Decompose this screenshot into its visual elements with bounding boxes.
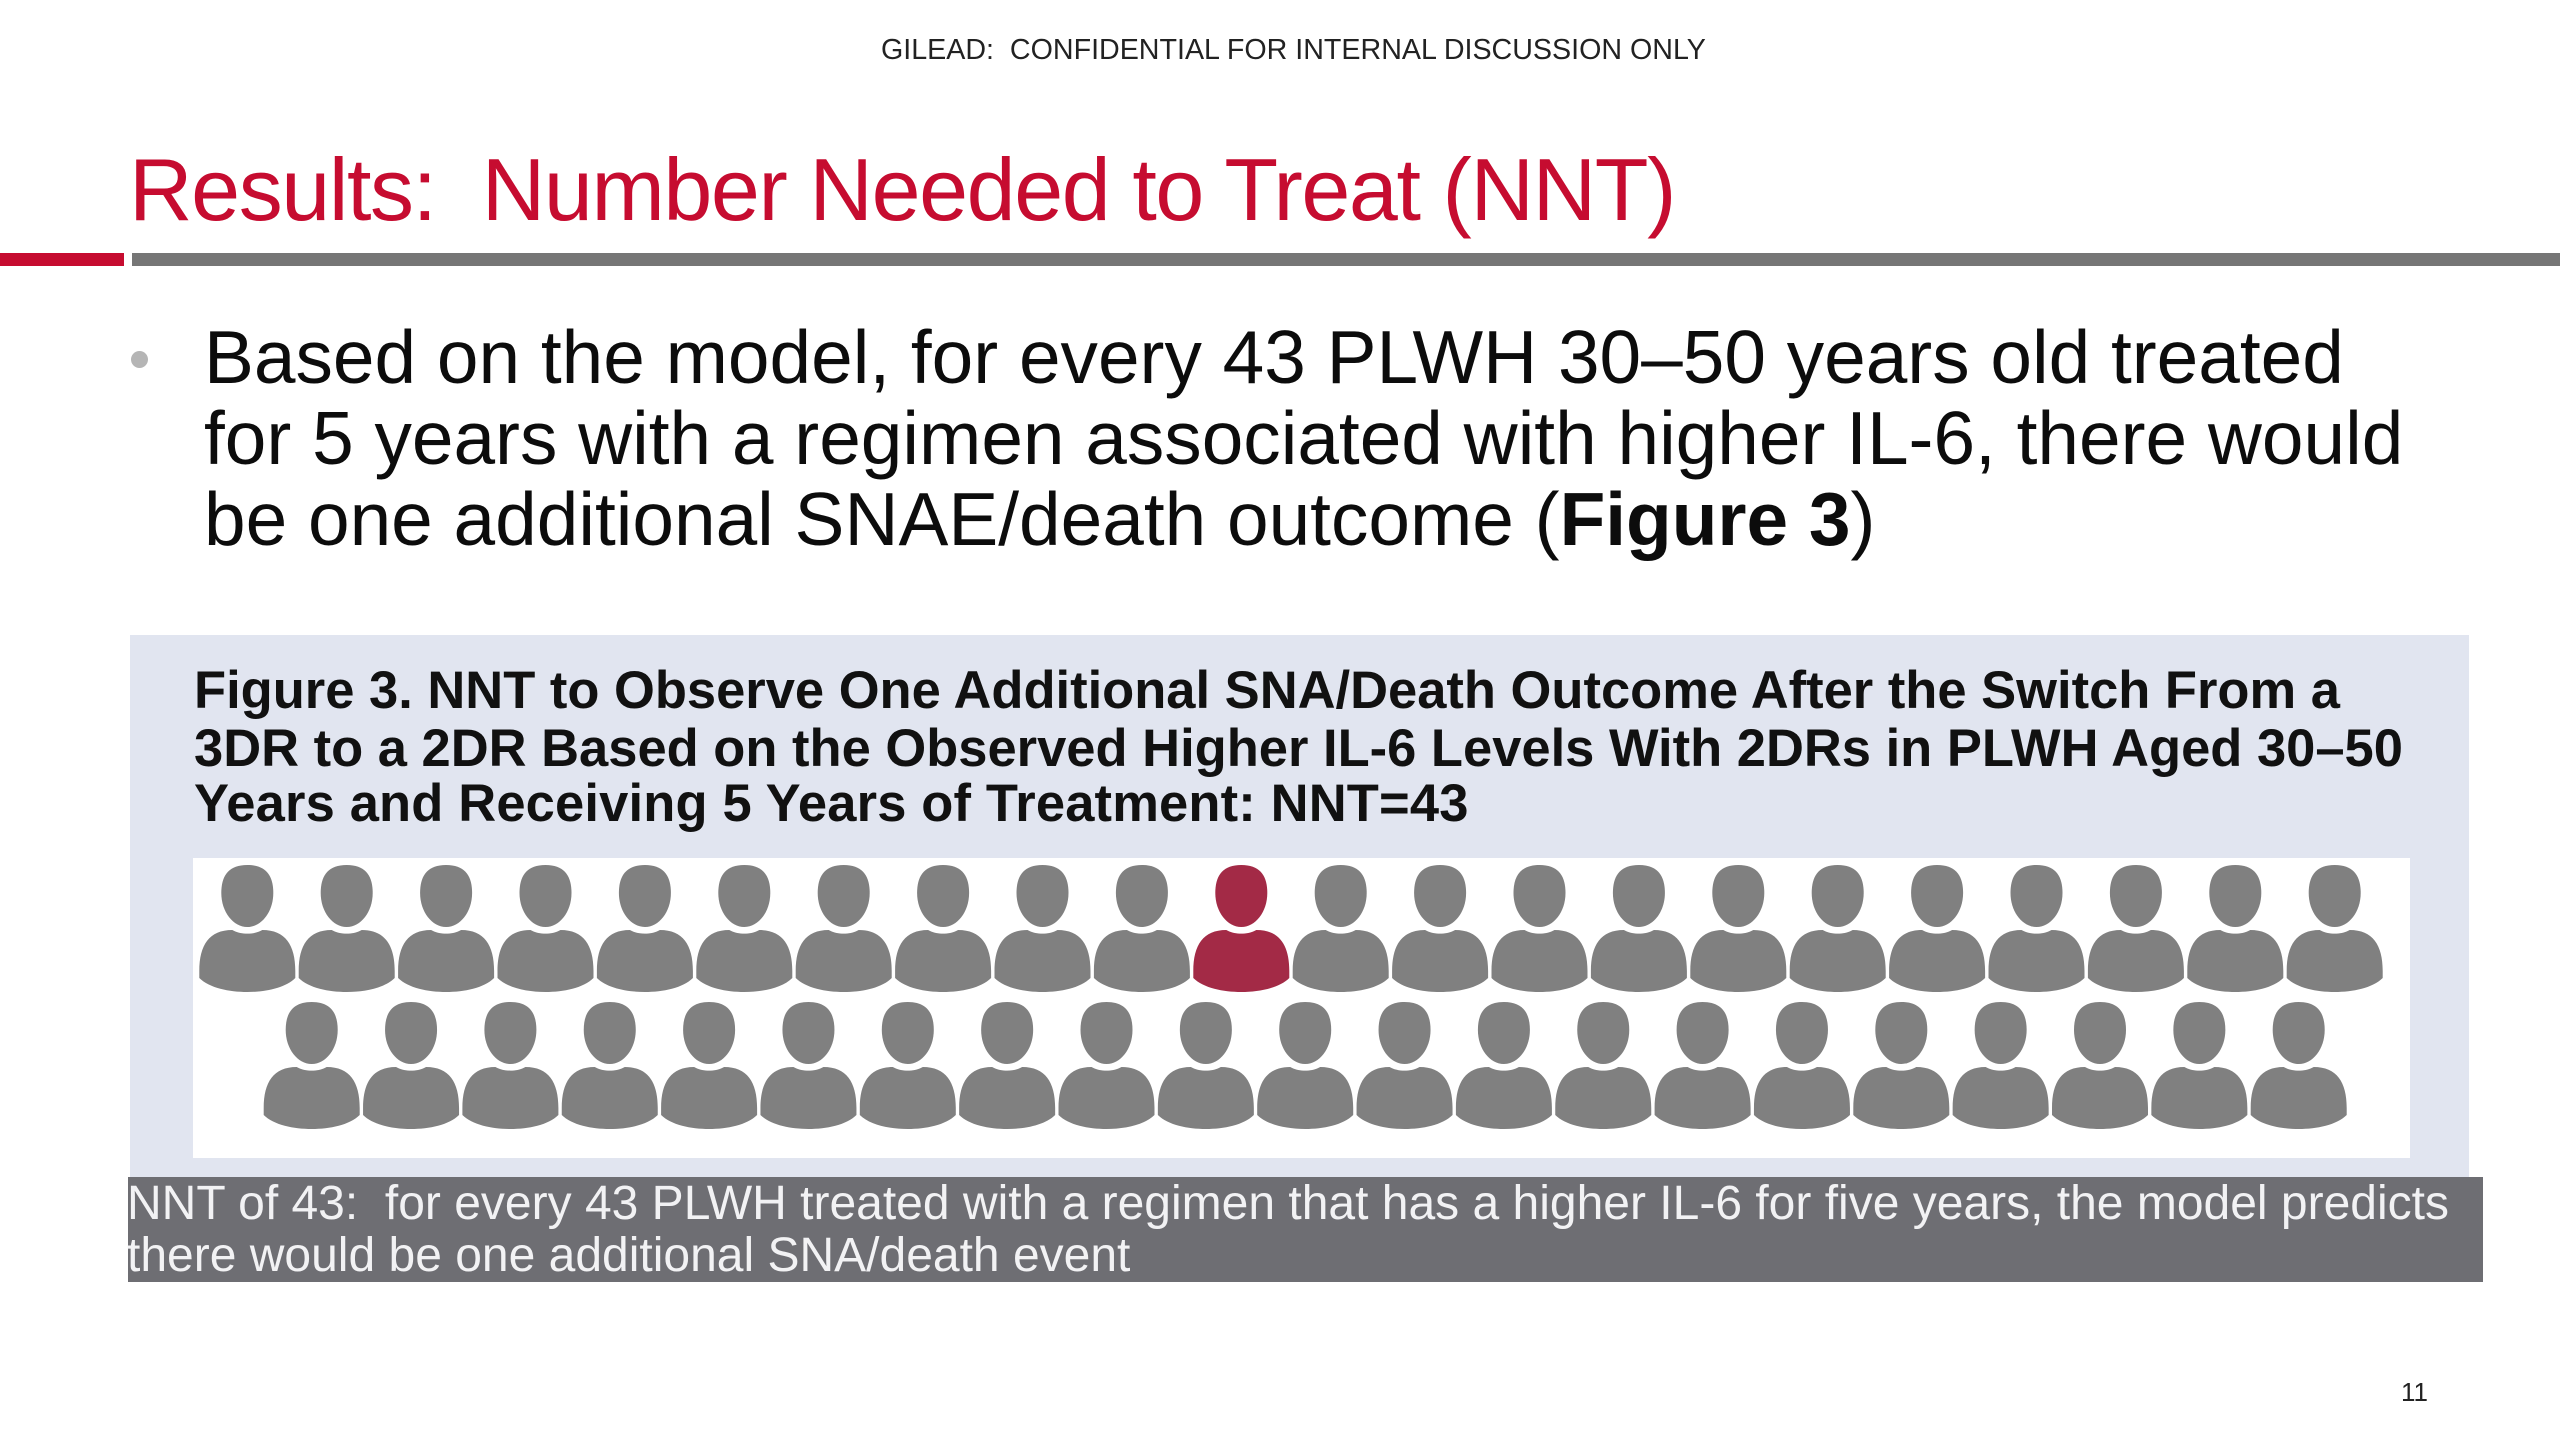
pictogram area <box>193 858 2410 1158</box>
body text: be one additional SNAE/death outcome (Figure 3) <box>204 477 1875 561</box>
callout: NNT explanation: there would be one additional SNA/death event <box>127 1229 1130 1282</box>
icon: highlighted person <box>1193 865 1289 992</box>
callout: NNT explanation <box>128 1177 2483 1282</box>
bullet marker <box>131 351 148 368</box>
figure heading: 3DR to a 2DR Based on the Observed Higher IL-6 Levels With 2DRs in PLWH Aged 30–50 <box>194 719 2403 778</box>
title: Results: Number Needed to Treat (NNT) <box>129 140 1675 239</box>
header confidentiality notice: GILEAD: CONFIDENTIAL FOR INTERNAL DISCUSSION ONLY <box>881 34 1706 66</box>
panel: figure 3 <box>130 635 2469 1177</box>
body text: Based on the model, for every 43 PLWH 30–50 years old treated <box>204 315 2344 399</box>
figure heading: Years and Receiving 5 Years of Treatment: NNT=43 <box>194 774 1469 833</box>
body text: for 5 years with a regimen associated with higher IL-6, there would <box>204 396 2403 480</box>
figure heading: Figure 3. NNT to Observe One Additional SNA/Death Outcome After the Switch From a <box>194 661 2340 720</box>
callout: NNT explanation: NNT of 43: for every 43 PLWH treated with a regimen that has a higher IL-6 for five years, the model predicts <box>127 1177 2449 1230</box>
row 1: 22 people <box>199 865 2383 992</box>
row 2: 21 people <box>264 1002 2347 1129</box>
body text <box>204 315 2403 561</box>
page number: 11 <box>2401 1377 2428 1407</box>
figure heading <box>194 661 2403 833</box>
title rule: red accent <box>0 253 124 266</box>
title rule: gray bar <box>132 253 2560 266</box>
